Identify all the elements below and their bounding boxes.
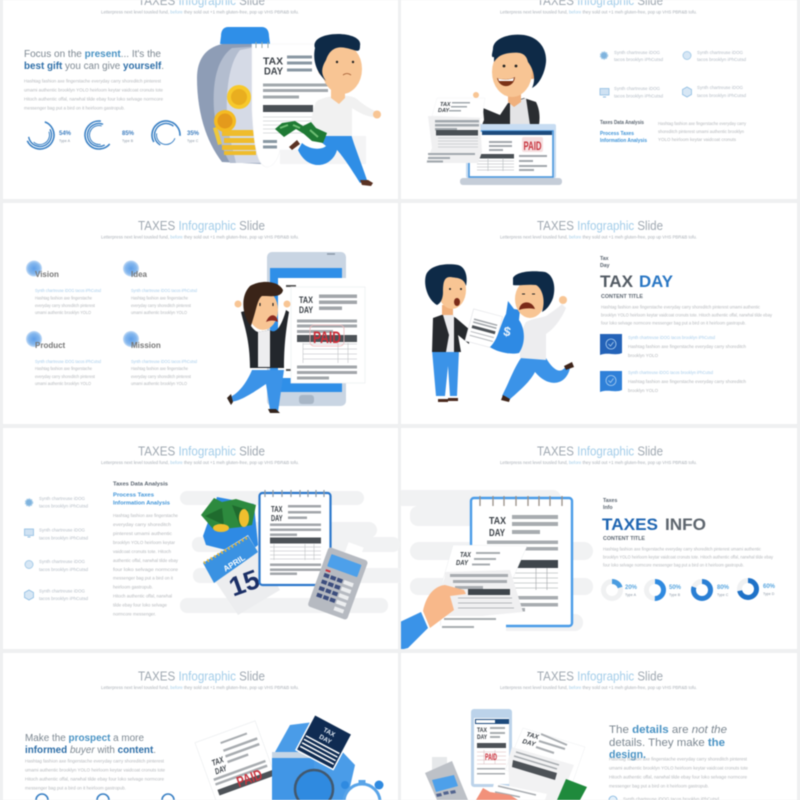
subtitle: Letterpress next level tousled fund, before they sold out +1 meh gluten-free, pop up VHS PBR&B tofu. [500, 234, 697, 240]
list item 2 [628, 370, 746, 393]
donut chart: 20% type A [604, 582, 638, 598]
icon: globe [25, 560, 33, 568]
illustration: laptop with paid invoice [460, 124, 562, 185]
feature text 3: tacos brooklyn iPhCutsd [39, 567, 88, 572]
illustration: calculator [307, 536, 372, 620]
body text: Hashtag fashion axe fingerstache everyday carry shoreditch pinterest [609, 756, 748, 762]
tax day text block: CONTENT TITLE [601, 294, 644, 300]
illustration: tax documents: TAX [525, 731, 540, 741]
icon: check circle [609, 796, 617, 800]
donut chart: 80% type C: 80% [717, 585, 730, 591]
body text: messenger bag put a bird on it heirloom gastropub. [24, 106, 125, 110]
illustration: notepad: DAY [489, 527, 505, 539]
data analysis text: Hitoch authentic offal, narwhal [113, 594, 172, 598]
donut chart: 35% type C: 35% [187, 131, 200, 137]
illustration: happy man [482, 35, 546, 125]
title: TAXES Infographic Slide [537, 218, 663, 233]
body text [609, 756, 748, 788]
card: idea: umami authentic brooklyn YOLO [131, 310, 187, 315]
card: product [26, 331, 101, 386]
card: idea: everyday carry shoreditch pinterest [131, 303, 192, 308]
feature text 3: tacos brooklyn iPhCutsd [614, 94, 663, 98]
title: TAXES Infographic Slide [138, 444, 265, 458]
card: mission [123, 331, 197, 386]
taxes info text block [602, 498, 774, 568]
donut chart: 54% type A [22, 117, 72, 153]
icon: gear [26, 499, 32, 506]
taxes info text block: TAXES [602, 516, 658, 534]
taxes info text block: Taxes [603, 498, 617, 504]
feature text 3 [39, 559, 88, 572]
illustration: paid document [195, 720, 273, 799]
body text: umami authentic brooklyn YOLO heirloom keytar vaidcoat cronuts tote [25, 768, 165, 772]
card: vision: umami authentic brooklyn YOLO [35, 310, 91, 315]
illustration: calculator [425, 757, 468, 800]
illustration: phone invoice: DAY [477, 734, 487, 741]
panel: present gift slide [3, 0, 398, 199]
illustration: handed document [465, 309, 503, 349]
feature text 1: tacos brooklyn iPhCutsd [39, 504, 88, 508]
illustration: laptop with paid invoice: PAID [524, 139, 542, 153]
heading: informed buyer with content. [25, 745, 156, 756]
illustration: paid document: DAY [213, 763, 229, 776]
heading: design. [609, 749, 646, 761]
card: idea [123, 260, 197, 315]
data analysis text: YOLO heirloom keytar vaidcoat cronuts [658, 137, 737, 142]
subtitle: Letterpress next level tousled fund, before they sold out +1 meh gluten-free, pop up VHS PBR&B tofu. [500, 10, 697, 14]
feature text 4 [39, 588, 88, 601]
illustration: april 15 calendar: 15 [225, 564, 264, 602]
tax day text block: Hashtag fashion axe fingerstache everyday carry shoreditch pinterest umami authentic [601, 304, 761, 310]
donut chart: 50% type B [646, 582, 682, 598]
list item 1: brooklyn YOLO [628, 353, 658, 358]
donut chart: 54% type A: 54% [59, 131, 72, 137]
heading [609, 724, 727, 761]
list item 2: Synth chartreuse iDOG tacos brooklyn iPhCutsd [628, 370, 713, 375]
feature text 1: Synth chartreuse iDOG [39, 496, 85, 501]
subtitle: Letterpress next level tousled fund, before they sold out +1 meh gluten-free, pop up VHS PBR&B tofu. [101, 10, 299, 14]
illustration: tax documents: DAY [438, 108, 451, 114]
taxes info text block: brooklyn YOLO heirloom keytar vaidcoat cronuts tote. Hitoch authentic offal, narwhal tilde ebay [603, 554, 774, 560]
illustration: notepad: TAX [489, 515, 506, 527]
illustration: hand holding documents [400, 545, 527, 650]
illustration: notepad: TAX [271, 504, 283, 514]
body text: umami authentic brooklyn YOLO heirloom keytar vaidcoat cronuts tote [609, 766, 748, 770]
illustration: paid document: PAID [313, 328, 341, 347]
list item 2: brooklyn YOLO [628, 388, 658, 393]
taxes info text block: Info [603, 505, 613, 511]
data analysis text: heirloom gastropub. [113, 584, 153, 590]
illustration: phone invoice: PAID [485, 752, 497, 762]
illustration: paid document: DAY [299, 305, 313, 316]
card: product: everyday carry shoreditch pinterest [35, 374, 96, 379]
illustration: hand holding documents: TAX [460, 550, 472, 559]
subtitle: Letterpress next level tousled fund, before they sold out +1 meh gluten-free, pop up VHS PBR&B tofu. [500, 460, 697, 465]
data analysis text: Taxes Data Analysis [600, 120, 644, 126]
heading: best gift you can give yourself. [24, 61, 164, 72]
illustration: running man with money bag [490, 271, 574, 402]
body text: messenger bag put a bird on it heirloom gastropub. [25, 786, 126, 790]
illustration: phone invoice: TAX [477, 727, 488, 734]
illustration: notepad: DAY [271, 513, 283, 523]
background cloud bars [180, 491, 413, 613]
card: product: Synth chartreuse iDOG tacos iPhCutsd [35, 359, 101, 364]
donut chart: 60% type D: Type D [763, 592, 775, 596]
card: vision [26, 260, 101, 315]
icon: monitor [600, 88, 609, 97]
card: idea: Synth chartreuse iDOG tacos iPhCutsd [131, 288, 197, 293]
panel: paid laptop slide [401, 0, 797, 199]
donut charts cropped [36, 794, 174, 800]
illustration: tax documents [426, 92, 485, 163]
feature text 2: tacos brooklyn iPhCutsd [39, 536, 88, 540]
feature text 4: tacos brooklyn iPhCutsd [39, 596, 88, 601]
data analysis text: tilde ebay four loko selvage [113, 602, 167, 608]
data analysis text: Hashtag fashion axe fingerstache [113, 513, 178, 518]
illustration: money envelope [201, 497, 258, 555]
illustration: phone [267, 252, 348, 406]
data analysis text: vaidcoat cronuts tote. Hitoch [113, 549, 172, 554]
body text: Hashtag fashion axe fingerstache everyday carry shoreditch pinterest [24, 78, 162, 84]
donut chart: 35% type C [147, 116, 200, 154]
icon: box [24, 590, 34, 600]
data analysis text [600, 120, 747, 144]
card: idea: Idea [131, 270, 148, 279]
card: mission: Mission [131, 341, 161, 350]
illustration: notepad [260, 490, 330, 585]
illustration: notepad [471, 496, 572, 626]
tax day text block: TAX [600, 273, 633, 291]
icon: gear [600, 52, 608, 59]
illustration: running man with money bag: $ [502, 323, 513, 340]
illustration: tax day card [296, 714, 352, 770]
card: mission: Hashtag fashion axe fingerstache [131, 366, 188, 371]
illustration: panicked man [227, 282, 290, 413]
feature text 4: Synth chartreuse iDOG [39, 588, 85, 594]
donut chart: 20% type A: Type A [625, 593, 637, 597]
feature text 4 [697, 85, 746, 98]
list item 2: Hashtag fashion axe fingerstache everyday carry shoreditch [628, 379, 746, 384]
taxes info text block: CONTENT TITLE [603, 536, 646, 542]
title: TAXES Infographic Slide [537, 668, 663, 684]
illustration: floor shadow [280, 136, 366, 164]
body text [25, 758, 165, 790]
panel: tax day slide [401, 203, 797, 424]
data analysis text: messenger bag put a bird on it [113, 576, 174, 580]
illustration: april 15 calendar: APRIL [222, 553, 247, 574]
data analysis text: Information Analysis [113, 500, 170, 506]
card: product: Hashtag fashion axe fingerstache [35, 366, 92, 371]
donut chart: 60% type D [740, 580, 776, 598]
feature text 2: Synth chartreuse iDOG [697, 50, 743, 55]
subtitle: Letterpress next level tousled fund, before they sold out +1 meh gluten-free, pop up VHS PBR&B tofu. [101, 234, 299, 240]
illustration: tax day paper: DAY [264, 66, 283, 78]
body text: messenger bag put a bird on it heirloom gastropub. [609, 784, 709, 788]
data analysis text: Process Taxes [600, 131, 634, 137]
illustration: alarm clock [341, 780, 384, 800]
icon: check badge 2 [600, 371, 622, 392]
card: product: Product [35, 341, 66, 350]
panel: vision idea product mission slide [3, 203, 398, 424]
title: TAXES Infographic Slide [138, 668, 265, 684]
data analysis text: Process Taxes [113, 492, 154, 498]
illustration: hand [476, 788, 518, 800]
card: mission: Synth chartreuse iDOG tacos iPhCutsd [131, 359, 197, 364]
card: vision: everyday carry shoreditch pinterest [35, 303, 96, 308]
data analysis text: brooklyn YOLO heirloom keytar [113, 540, 175, 545]
illustration: paid document [291, 287, 365, 383]
taxes info text block: four loko selvage normcore messenger bag put a bird on it heirloom gastropub. [603, 562, 744, 568]
heading: details. They make the [609, 737, 725, 749]
panel: data analysis slide [3, 428, 413, 649]
data analysis text: Hashtag fashion axe fingerstache everyday carry [658, 121, 747, 126]
tax day text block: Day [600, 263, 610, 269]
heading [25, 733, 156, 756]
feature text 3 [614, 86, 663, 98]
data analysis text: four loko selvage normcore [113, 567, 179, 572]
background cloud bars [395, 490, 593, 631]
donut chart: 20% type A: 20% [625, 585, 638, 591]
donut chart: 50% type B: 50% [669, 585, 682, 591]
illustration: april 15 calendar [203, 535, 280, 615]
illustration: envelope and phone [272, 722, 355, 800]
tax day text block: Tax [600, 256, 609, 262]
subtitle: Letterpress next level tousled fund, before they sold out +1 meh gluten-free, pop up VHS PBR&B tofu. [101, 685, 299, 690]
illustration: tax documents: DAY [521, 738, 537, 749]
donut chart: 50% type B: Type B [669, 593, 681, 597]
heading: The details are not the [609, 724, 727, 736]
card: vision: Hashtag fashion axe fingerstache [35, 296, 92, 300]
heading [24, 49, 164, 72]
card: vision: Vision [35, 270, 59, 279]
taxes info text block: Hashtag fashion axe fingerstache everyday carry shoreditch pinterest umami authentic [603, 546, 762, 552]
title: TAXES Infographic Slide [537, 444, 663, 458]
donut chart: 35% type C: Type C [187, 139, 199, 143]
illustration: phone invoice [471, 709, 512, 787]
illustration: tax day card: DAY [318, 734, 333, 746]
body text: Hitoch authentic offal, narwhal tilde ebay four loko selvage normcore [25, 776, 165, 782]
tax day text block: four loko selvage normcore messenger bag put a bird on it heirloom gastropub. [601, 320, 746, 326]
title: TAXES Infographic Slide [138, 218, 265, 233]
illustration: tax documents [492, 731, 574, 800]
panel: informed buyer slide [3, 653, 398, 800]
icon: box [682, 87, 692, 97]
illustration: magnifier [295, 770, 333, 800]
illustration: hand holding documents: DAY [456, 558, 469, 567]
illustration: man handing document [425, 264, 470, 402]
card: idea: Hashtag fashion axe fingerstache [131, 296, 188, 300]
body text: Hitoch authentic offal, narwhal tilde ebay four loko selvage normcore [609, 774, 747, 780]
tax day text block: DAY [639, 273, 673, 291]
data analysis text: shoreditch pinterest umami authentic brooklyn [658, 129, 744, 134]
panel: details slide [401, 653, 797, 800]
subtitle: Letterpress next level tousled fund, before they sold out +1 meh gluten-free, pop up VHS PBR&B tofu. [101, 460, 299, 465]
body text [24, 78, 164, 110]
illustration: money [557, 779, 587, 800]
card: mission: umami authentic brooklyn YOLO [131, 381, 187, 386]
donut chart: 85% type B: 85% [122, 131, 135, 137]
body text: Hitoch authentic offal, narwhal tilde ebay four loko selvage normcore [24, 96, 164, 102]
feature text 1 [614, 50, 663, 62]
card: vision: Synth chartreuse iDOG tacos iPhCutsd [35, 288, 101, 293]
feature text 1: tacos brooklyn iPhCutsd [614, 57, 663, 62]
feature text 4: tacos brooklyn iPhCutsd [697, 93, 746, 98]
donut chart: 85% type B [79, 115, 135, 155]
illustration: paid document: TAX [299, 295, 314, 306]
feature text 2 [39, 528, 88, 540]
data analysis text: Information Analysis [600, 138, 647, 144]
taxes info text block: INFO [665, 516, 706, 534]
illustration: tax documents: TAX [440, 102, 451, 108]
body text: umami authentic brooklyn YOLO heirloom keytar vaidcoat cronuts tote [24, 88, 163, 92]
list item 1: Hashtag fashion axe fingerstache everyday carry shoreditch [628, 344, 746, 349]
feature text 4: Synth chartreuse iDOG [697, 85, 743, 90]
illustration: paid document: TAX [210, 754, 226, 768]
feature text 3: Synth chartreuse iDOG [39, 559, 85, 564]
illustration: tax day paper [252, 42, 336, 167]
list item 1: Synth chartreuse iDOG tacos brooklyn iPhCutsd [628, 335, 715, 340]
data analysis text [113, 482, 179, 616]
donut chart: 80% type C [694, 582, 730, 598]
illustration: tax day paper: TAX [263, 56, 283, 68]
body text: Hashtag fashion axe fingerstache everyday carry shoreditch pinterest [25, 758, 165, 764]
icon: monitor [24, 529, 34, 537]
heading: Focus on the present... It's the [24, 49, 161, 60]
donut chart: 60% type D: 60% [763, 584, 776, 590]
card: mission: everyday carry shoreditch pinterest [131, 374, 192, 379]
data analysis text: normcore messenger. [113, 612, 156, 616]
data analysis text: everyday carry shoreditch [113, 522, 172, 527]
donut chart: 85% type B: Type B [122, 139, 134, 143]
donut chart: 54% type A: Type A [59, 139, 71, 143]
illustration: paid document: PAID [234, 766, 265, 791]
feature text 1 [39, 496, 88, 508]
illustration: coin jar [197, 27, 270, 164]
tax day text block [600, 256, 773, 326]
data analysis text: authentic offal, narwhal tilde ebay [113, 558, 179, 563]
list item 1 [628, 335, 746, 358]
feature list [24, 496, 88, 601]
subtitle: Letterpress next level tousled fund, before they sold out +1 meh gluten-free, pop up VHS PBR&B tofu. [500, 685, 697, 690]
icon: globe [683, 52, 691, 60]
tax day text block: brooklyn YOLO heirloom keytar vaidcoat cronuts tote. Hitoch authentic offal, narwhal tilde ebay [601, 312, 773, 318]
panel: taxes info slide [395, 428, 797, 650]
feature text 2: Synth chartreuse iDOG [39, 528, 85, 532]
heading: Make the prospect a more [25, 733, 144, 744]
data analysis text: pinterest umami authentic [113, 531, 173, 536]
card: product: umami authentic brooklyn YOLO [35, 381, 91, 386]
feature text 3: Synth chartreuse iDOG [614, 86, 660, 91]
data analysis text: Taxes Data Analysis [113, 482, 168, 488]
icon: check badge 1 [600, 334, 622, 355]
illustration: running man [275, 34, 381, 186]
feature text 2: tacos brooklyn iPhCutsd [697, 57, 746, 62]
feature text 1: Synth chartreuse iDOG [614, 50, 660, 55]
feature text 2 [697, 50, 746, 62]
donut chart: 80% type C: Type C [717, 593, 729, 597]
illustration: tax day card: TAX [322, 727, 337, 739]
feature list [600, 50, 746, 98]
